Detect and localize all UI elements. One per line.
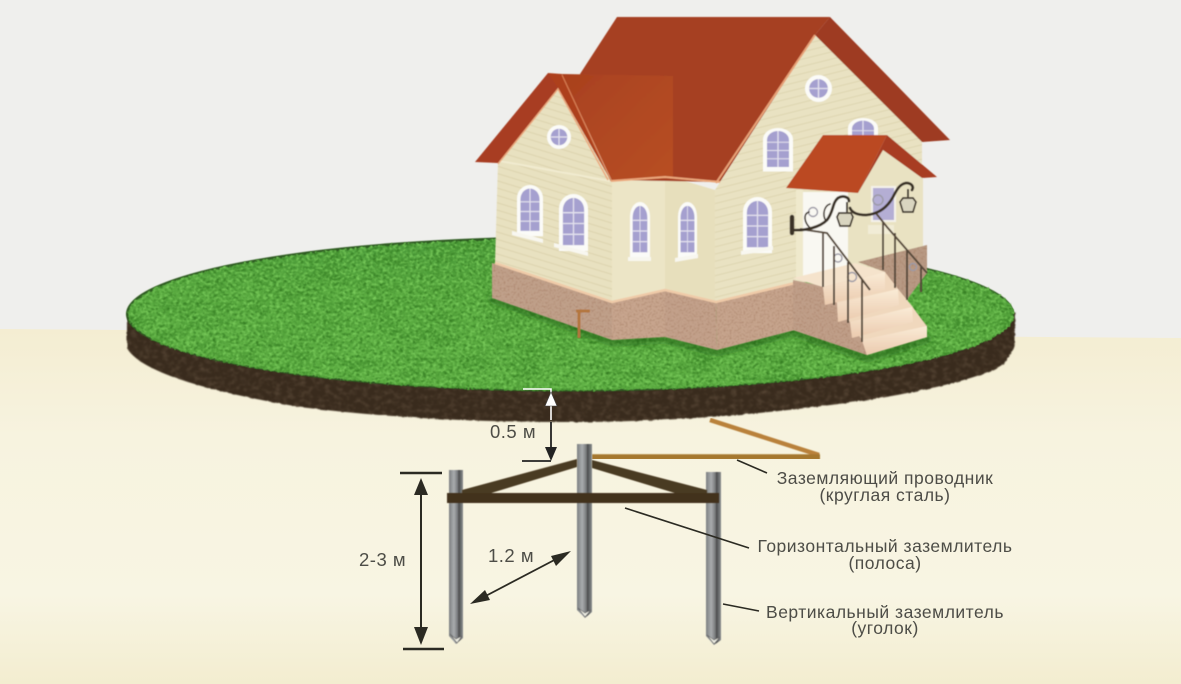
grass top bbox=[128, 238, 1014, 390]
step 3 bbox=[850, 307, 913, 338]
front railing bbox=[800, 229, 870, 342]
wrought-iron brackets bbox=[792, 183, 913, 233]
front gable ridge line bbox=[562, 75, 611, 181]
porch column bbox=[796, 190, 803, 280]
windows bbox=[517, 75, 878, 258]
walls bbox=[495, 35, 922, 302]
foundation bbox=[492, 263, 795, 350]
dimension: 2-3 m bbox=[359, 473, 444, 649]
grass rim bbox=[126, 236, 1014, 392]
dimension: 0.5 m bbox=[490, 389, 557, 461]
dimension: 2-3 m: 2-3 м bbox=[359, 549, 406, 570]
house bbox=[475, 17, 950, 355]
step 1 bbox=[823, 272, 885, 305]
label: grounding conductor: (круглая сталь) bbox=[819, 485, 951, 505]
label: horizontal electrode: Горизонтальный заземлитель bbox=[758, 536, 1012, 556]
stair underlay bbox=[793, 272, 927, 355]
porch roof right slope bbox=[858, 135, 937, 193]
front gable left slope bbox=[475, 73, 560, 163]
main roof right slope bbox=[815, 17, 950, 142]
entrance door bbox=[803, 192, 848, 278]
porch wall bbox=[797, 150, 923, 283]
window sills bbox=[512, 231, 773, 262]
porch roof front bbox=[786, 135, 887, 193]
eave trim bbox=[611, 177, 720, 182]
rod middle bbox=[577, 444, 592, 618]
main roof bbox=[580, 17, 830, 182]
background: sky bbox=[0, 0, 1181, 340]
soil layer bbox=[127, 312, 1015, 422]
stair body bbox=[823, 272, 927, 355]
stairs bbox=[793, 263, 927, 355]
strip diagonals and horizontal earth electrode bbox=[447, 459, 719, 503]
decorative scrolls bbox=[808, 195, 916, 282]
lamp right bbox=[900, 189, 916, 212]
label: vertical electrode: (уголок) bbox=[851, 618, 919, 638]
label: vertical electrode: Вертикальный заземлитель bbox=[766, 602, 1004, 622]
rod right bbox=[706, 472, 721, 645]
front gable wedge bbox=[548, 73, 611, 181]
label: grounding conductor: Заземляющий проводник bbox=[777, 468, 993, 488]
front door pipe bbox=[576, 311, 590, 338]
porch bbox=[786, 135, 937, 302]
landing bbox=[793, 263, 885, 287]
step 4 bbox=[862, 326, 927, 355]
vertical rods bbox=[449, 444, 721, 645]
lawn disc with soil bbox=[126, 236, 1015, 422]
dimension: 1.2 m bbox=[470, 545, 571, 604]
background: ground bbox=[0, 329, 1181, 684]
shadow under house bbox=[490, 298, 930, 358]
lamp left bbox=[837, 202, 853, 226]
back foundation bbox=[858, 245, 927, 302]
rod left bbox=[449, 470, 463, 644]
back railing bbox=[875, 212, 927, 300]
stair side wall bbox=[793, 282, 867, 355]
grounding conductor bbox=[592, 420, 820, 457]
dimension: 0.5 m: 0.5 м bbox=[490, 421, 536, 442]
front gable trim bbox=[498, 89, 608, 180]
step 2 bbox=[837, 289, 899, 322]
right gable trim bbox=[716, 35, 815, 183]
porch window bbox=[868, 187, 895, 234]
label: horizontal electrode: (полоса) bbox=[848, 553, 922, 573]
leader lines bbox=[625, 460, 767, 611]
dimension: 1.2 m: 1.2 м bbox=[488, 545, 534, 566]
front gable roof face bbox=[562, 74, 673, 181]
